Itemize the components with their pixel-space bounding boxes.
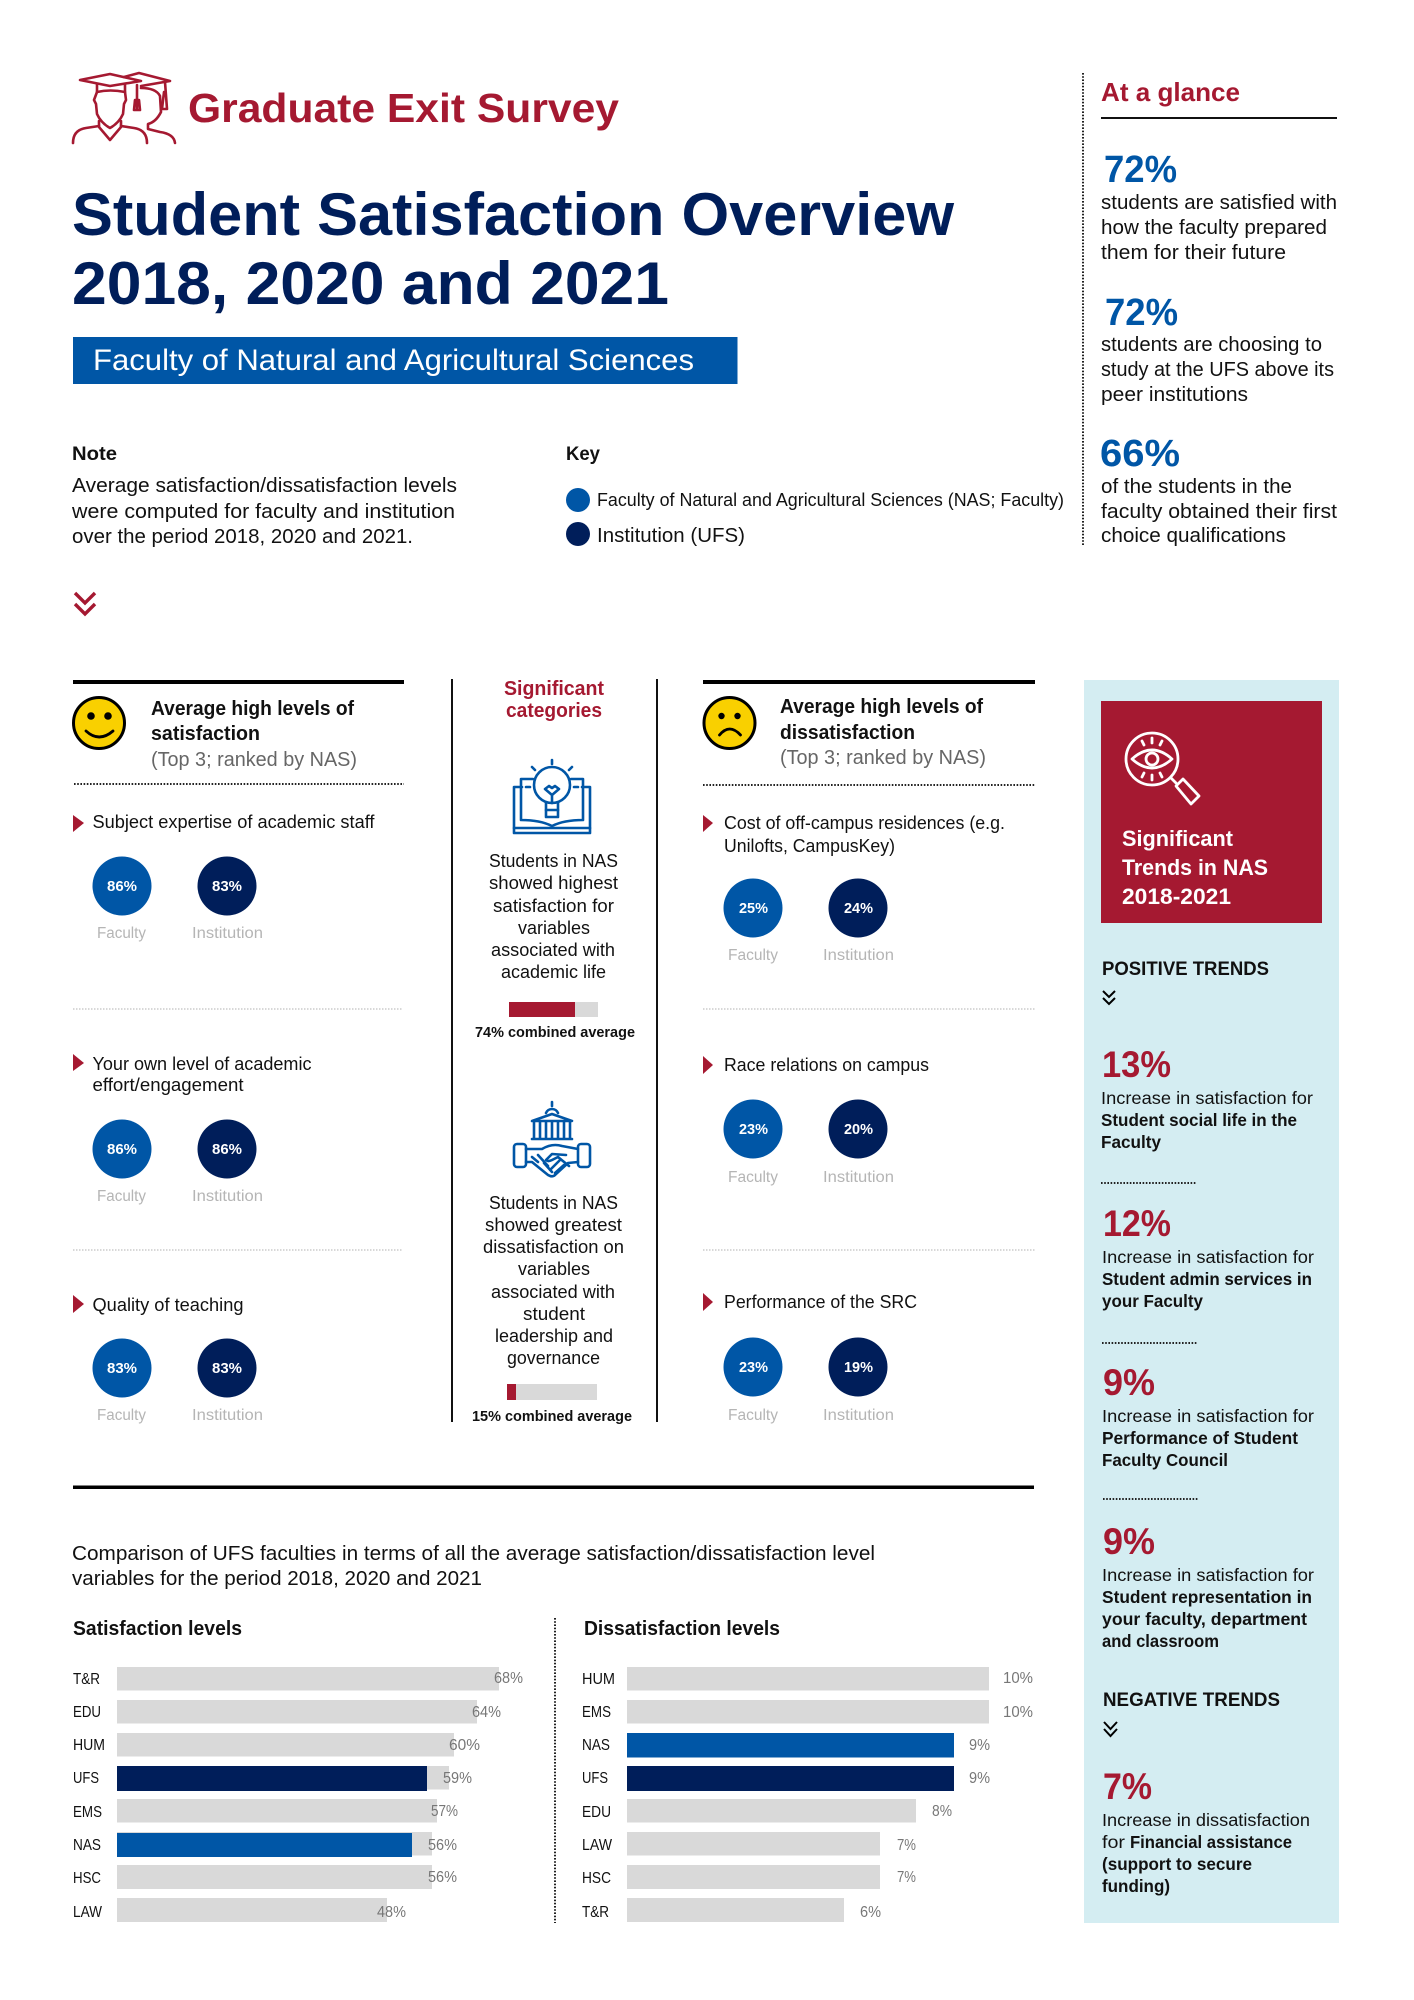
chart: dissatisfaction levels: 10% xyxy=(1003,1704,1033,1721)
text: highest satisfaction: variables xyxy=(518,918,590,938)
stat: 66 percent first choice: faculty obtained their first xyxy=(1101,501,1337,523)
chart: dissatisfaction levels: 8% xyxy=(932,1803,952,1820)
item: subject expertise: Faculty xyxy=(97,925,146,942)
card: significant trends header: Significant xyxy=(1122,826,1233,851)
chart: satisfaction levels: LAW xyxy=(73,1904,103,1921)
chart: satisfaction levels: 48% xyxy=(377,1904,406,1921)
trend: 9 percent representation: 9% xyxy=(1103,1521,1155,1562)
trend: 9 percent student council: Increase in satisfaction for xyxy=(1102,1406,1314,1426)
item: academic effort: effort/engagement xyxy=(92,1075,244,1095)
heading: significant categories xyxy=(504,678,604,722)
item: academic effort: Institution xyxy=(192,1188,263,1205)
trend: 7 percent: Increase in dissatisfaction xyxy=(1102,1810,1310,1830)
note: over the period 2018, 2020 and 2021. xyxy=(72,525,413,548)
card: significant trends header: Trends in NAS xyxy=(1122,855,1268,880)
chart: dissatisfaction levels: 6% xyxy=(860,1904,881,1921)
chart: dissatisfaction levels: 9% xyxy=(969,1737,990,1754)
item: performance of the SRC: 23% xyxy=(739,1359,768,1376)
item: academic effort: 86% xyxy=(212,1141,242,1158)
trend: 7 percent: (support to secure xyxy=(1102,1854,1252,1874)
faculty banner xyxy=(73,337,738,384)
icon: institution and handshake xyxy=(514,1102,590,1176)
chart: dissatisfaction levels: 9% xyxy=(969,1770,990,1787)
key: Key xyxy=(566,443,600,465)
heading: positive trends xyxy=(1102,958,1269,1004)
card: significant trends header xyxy=(1101,701,1322,923)
heading: significant categories: categories xyxy=(506,700,602,722)
chart: dissatisfaction levels: T&R xyxy=(582,1904,609,1921)
item: cost of residences: Cost of off-campus residences (e.g. xyxy=(724,813,1005,833)
item: cost of residences: 25% xyxy=(739,900,768,917)
item: performance of the SRC xyxy=(703,1292,917,1424)
trend: 9 percent student council: Performance of Student xyxy=(1102,1428,1298,1448)
item: quality of teaching xyxy=(73,1295,263,1424)
faculty banner: Faculty of Natural and Agricultural Sciences xyxy=(93,344,694,377)
title xyxy=(72,181,954,317)
heading: Graduate Exit Survey: Graduate Exit Survey xyxy=(188,85,619,131)
heading: dissatisfaction xyxy=(780,696,986,769)
stat: 66 percent first choice: 66% xyxy=(1100,433,1180,475)
trend: 9 percent student council xyxy=(1102,1362,1314,1470)
text: greatest dissatisfaction: variables xyxy=(518,1259,590,1279)
trend: 9 percent representation: your faculty, department xyxy=(1102,1609,1307,1629)
chart: dissatisfaction levels: NAS xyxy=(582,1737,610,1754)
note xyxy=(71,443,457,548)
chart: dissatisfaction levels: 7% xyxy=(897,1869,916,1886)
icon: smiley xyxy=(74,698,124,748)
stat: 72 percent choosing UFS: students are choosing to xyxy=(1101,334,1322,356)
progress bar: 74 percent: 74% combined average xyxy=(475,1024,635,1041)
title: Student Satisfaction Overview xyxy=(72,181,954,248)
text: highest satisfaction: satisfaction for xyxy=(493,896,614,916)
trend: 12 percent: Increase in satisfaction for xyxy=(1102,1247,1314,1267)
item: subject expertise: Institution xyxy=(192,925,263,942)
progress bar: 74 percent xyxy=(475,1002,635,1041)
panel: significant trends xyxy=(1084,680,1339,1923)
heading: dissatisfaction: dissatisfaction xyxy=(780,722,915,744)
item: quality of teaching: Institution xyxy=(192,1407,263,1424)
icon: double chevron xyxy=(75,593,95,614)
comparison intro text xyxy=(72,1542,875,1590)
stat: 66 percent first choice xyxy=(1100,433,1337,547)
stat: 72 percent prepared xyxy=(1101,149,1337,264)
chart: dissatisfaction levels: Dissatisfaction levels xyxy=(584,1618,780,1640)
trend: 12 percent xyxy=(1102,1203,1314,1311)
chart: satisfaction levels: 64% xyxy=(472,1704,501,1721)
item: performance of the SRC: Performance of the SRC xyxy=(724,1292,917,1312)
text: highest satisfaction: associated with xyxy=(491,940,615,960)
item: academic effort: 86% xyxy=(107,1141,137,1158)
item: subject expertise: 83% xyxy=(212,878,242,895)
heading: satisfaction: (Top 3; ranked by NAS) xyxy=(151,749,357,771)
note: were computed for faculty and institution xyxy=(71,500,455,523)
item: subject expertise: Subject expertise of academic staff xyxy=(92,812,375,832)
stat: 66 percent first choice: of the students in the xyxy=(1101,476,1292,498)
item: quality of teaching: 83% xyxy=(212,1360,242,1377)
trend: 13 percent: Faculty xyxy=(1101,1132,1161,1152)
item: race relations: Race relations on campus xyxy=(724,1055,929,1075)
heading: satisfaction: Average high levels of xyxy=(151,698,354,720)
trend: 9 percent student council: 9% xyxy=(1103,1362,1155,1403)
stat: 72 percent choosing UFS xyxy=(1101,292,1334,406)
panel: at a glance xyxy=(1100,77,1337,547)
chart: dissatisfaction levels: LAW xyxy=(582,1837,613,1854)
trend: 9 percent representation: Student representation in xyxy=(1102,1587,1312,1607)
item: cost of residences: Institution xyxy=(823,947,894,964)
trend: 9 percent representation: Increase in satisfaction for xyxy=(1102,1565,1314,1585)
heading: satisfaction xyxy=(151,698,357,771)
trend: 7 percent xyxy=(1102,1766,1310,1896)
key: Institution (UFS) xyxy=(597,524,745,547)
chart: satisfaction levels: EMS xyxy=(73,1804,102,1821)
stat: 72 percent prepared: 72% xyxy=(1104,149,1177,191)
chart: dissatisfaction levels: EMS xyxy=(582,1704,611,1721)
item: cost of residences xyxy=(703,813,1005,964)
item: subject expertise xyxy=(73,812,375,942)
text: greatest dissatisfaction: leadership and xyxy=(495,1326,613,1346)
text: highest satisfaction xyxy=(489,851,618,982)
trend: 9 percent student council: Faculty Council xyxy=(1102,1450,1228,1470)
chart: satisfaction levels: Satisfaction levels xyxy=(73,1618,242,1640)
panel: dissatisfaction xyxy=(703,680,1035,1424)
key xyxy=(566,443,1064,547)
chart: satisfaction levels: 57% xyxy=(431,1803,458,1820)
item: performance of the SRC: 19% xyxy=(844,1359,873,1376)
heading: positive trends: POSITIVE TRENDS xyxy=(1102,958,1269,980)
item: quality of teaching: 83% xyxy=(107,1360,137,1377)
chart: satisfaction levels: HSC xyxy=(73,1870,101,1887)
text: highest satisfaction: academic life xyxy=(501,962,606,982)
panel: satisfaction xyxy=(73,680,404,1424)
chart: dissatisfaction levels: HSC xyxy=(582,1870,611,1887)
chart: dissatisfaction levels: 7% xyxy=(897,1837,916,1854)
chart: satisfaction levels: 59% xyxy=(443,1770,472,1787)
text: greatest dissatisfaction: student xyxy=(523,1304,585,1324)
chart: dissatisfaction levels: UFS xyxy=(582,1770,608,1787)
item: cost of residences: Faculty xyxy=(728,947,778,964)
chart: satisfaction levels: NAS xyxy=(73,1837,101,1854)
text: greatest dissatisfaction: associated with xyxy=(491,1282,615,1302)
note: Average satisfaction/dissatisfaction levels xyxy=(72,474,457,497)
item: academic effort xyxy=(73,1054,312,1205)
icon: frowning face xyxy=(704,698,755,748)
comparison intro text: Comparison of UFS faculties in terms of all the average satisfaction/dissatisfaction level xyxy=(72,1542,875,1565)
heading: significant categories: Significant xyxy=(504,678,604,700)
chart: satisfaction levels: 60% xyxy=(449,1737,480,1754)
trend: 12 percent: Student admin services in xyxy=(1102,1269,1312,1289)
chart: satisfaction levels xyxy=(73,1618,523,1922)
text: greatest dissatisfaction xyxy=(483,1193,624,1368)
item: performance of the SRC: Institution xyxy=(823,1407,894,1424)
icon: eye in magnifying glass xyxy=(1126,733,1199,804)
heading: negative trends: NEGATIVE TRENDS xyxy=(1103,1689,1280,1711)
stat: 72 percent choosing UFS: peer institutions xyxy=(1101,384,1248,406)
chart: satisfaction levels: 68% xyxy=(494,1670,523,1687)
note: Note xyxy=(72,443,117,465)
text: greatest dissatisfaction: dissatisfaction on xyxy=(483,1237,624,1257)
text: highest satisfaction: showed highest xyxy=(489,873,618,893)
trend: 7 percent: for xyxy=(1102,1832,1125,1852)
card: significant trends header: 2018-2021 xyxy=(1122,884,1231,909)
chart: satisfaction levels: 56% xyxy=(428,1869,457,1886)
heading: dissatisfaction: (Top 3; ranked by NAS) xyxy=(780,747,986,769)
stat: 72 percent choosing UFS: study at the UFS above its xyxy=(1101,359,1334,381)
trend: 13 percent: Student social life in the xyxy=(1101,1110,1297,1130)
key: Faculty of Natural and Agricultural Sciences (NAS; Faculty) xyxy=(597,490,1064,510)
text: greatest dissatisfaction: Students in NAS xyxy=(489,1193,618,1213)
item: cost of residences: Unilofts, CampusKey) xyxy=(724,836,895,856)
chart: satisfaction levels: 56% xyxy=(428,1837,457,1854)
trend: 12 percent: your Faculty xyxy=(1102,1291,1203,1311)
stat: 72 percent prepared: them for their future xyxy=(1101,242,1286,264)
chart: dissatisfaction levels xyxy=(582,1618,1033,1922)
heading: satisfaction: satisfaction xyxy=(151,723,260,745)
panel: significant categories xyxy=(472,678,635,1425)
item: race relations: 20% xyxy=(844,1121,873,1138)
trend: 7 percent: funding) xyxy=(1102,1876,1170,1896)
text: greatest dissatisfaction: governance xyxy=(507,1348,600,1368)
title: 2018, 2020 and 2021 xyxy=(72,250,669,317)
chart: satisfaction levels: HUM xyxy=(73,1737,105,1754)
item: cost of residences: 24% xyxy=(844,900,873,917)
item: quality of teaching: Faculty xyxy=(97,1407,146,1424)
icon: two graduates xyxy=(73,73,175,143)
trend: 9 percent representation: and classroom xyxy=(1102,1631,1219,1651)
item: race relations: 23% xyxy=(739,1121,768,1138)
stat: 66 percent first choice: choice qualifications xyxy=(1101,525,1286,547)
trend: 13 percent: Increase in satisfaction for xyxy=(1101,1088,1313,1108)
text: highest satisfaction: Students in NAS xyxy=(489,851,618,871)
trend: 12 percent: 12% xyxy=(1103,1203,1171,1244)
item: subject expertise: 86% xyxy=(107,878,137,895)
item: race relations: Faculty xyxy=(728,1169,778,1186)
trend: 7 percent: Financial assistance xyxy=(1130,1832,1292,1852)
heading: negative trends xyxy=(1103,1689,1280,1736)
item: performance of the SRC: Faculty xyxy=(728,1407,778,1424)
trend: 13 percent: 13% xyxy=(1102,1044,1171,1085)
icon: light bulb and book xyxy=(514,760,590,833)
item: academic effort: Your own level of academic xyxy=(92,1054,312,1074)
item: race relations: Institution xyxy=(823,1169,894,1186)
comparison intro text: variables for the period 2018, 2020 and 2021 xyxy=(72,1567,482,1590)
text: greatest dissatisfaction: showed greatest xyxy=(485,1215,622,1235)
chart: dissatisfaction levels: 10% xyxy=(1003,1670,1033,1687)
chart: satisfaction levels: T&R xyxy=(73,1671,100,1688)
progress bar: 15 percent xyxy=(472,1384,632,1425)
trend: 7 percent: 7% xyxy=(1103,1766,1152,1807)
item: race relations xyxy=(703,1055,929,1186)
stat: 72 percent choosing UFS: 72% xyxy=(1105,292,1178,334)
chart: satisfaction levels: UFS xyxy=(73,1770,99,1787)
stat: 72 percent prepared: how the faculty prepared xyxy=(1101,217,1327,239)
item: quality of teaching: Quality of teaching xyxy=(92,1295,244,1315)
stat: 72 percent prepared: students are satisfied with xyxy=(1101,192,1337,214)
trend: 9 percent representation xyxy=(1102,1521,1314,1651)
progress bar: 15 percent: 15% combined average xyxy=(472,1408,632,1425)
heading: dissatisfaction: Average high levels of xyxy=(780,696,983,718)
chart: dissatisfaction levels: HUM xyxy=(582,1671,615,1688)
chart: dissatisfaction levels: EDU xyxy=(582,1804,611,1821)
item: academic effort: Faculty xyxy=(97,1188,146,1205)
panel: at a glance: At a glance xyxy=(1101,77,1240,107)
trend: 13 percent xyxy=(1101,1044,1313,1152)
chart: satisfaction levels: EDU xyxy=(73,1704,101,1721)
